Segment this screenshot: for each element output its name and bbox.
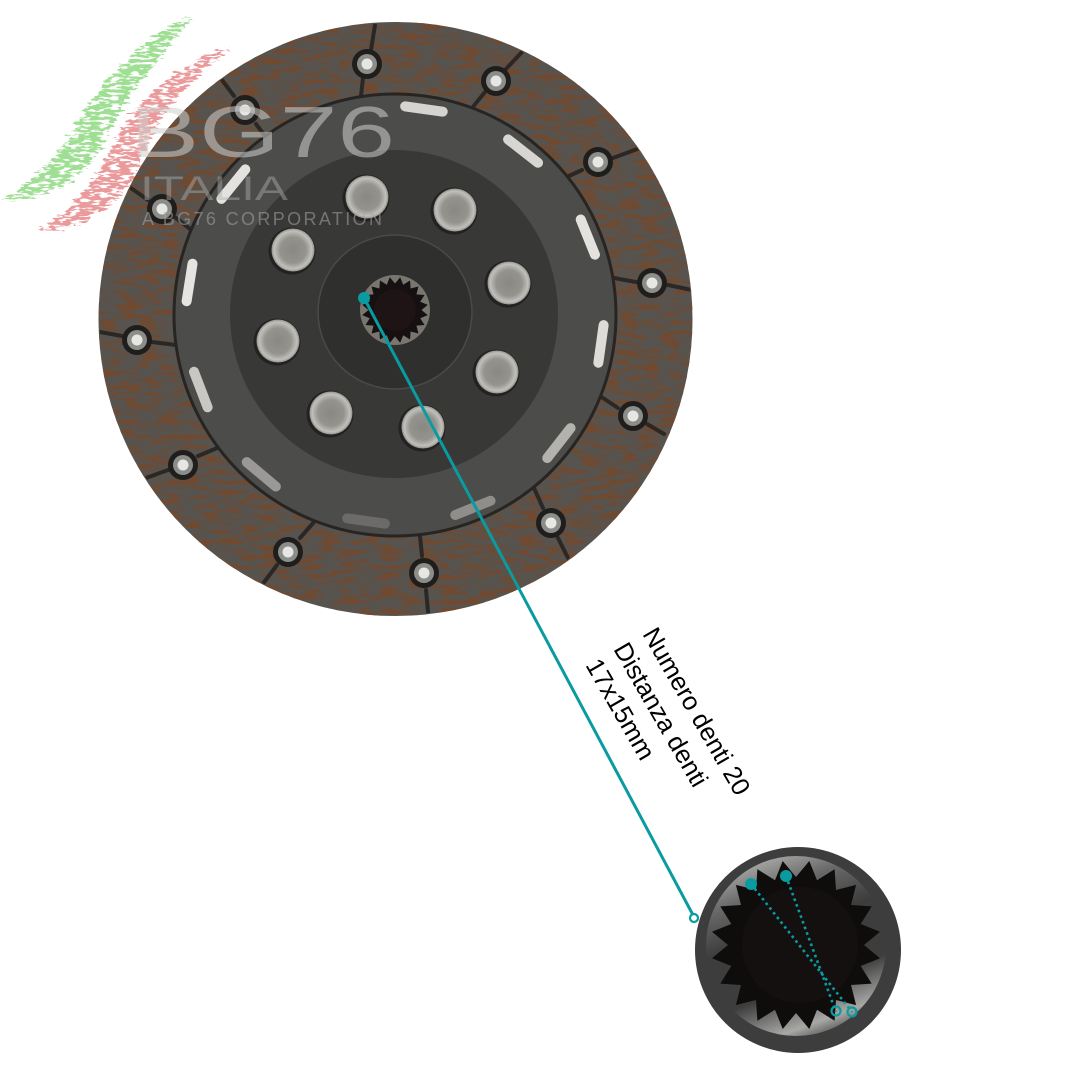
logo swoosh: red bbox=[38, 48, 230, 230]
logo wordmark bbox=[130, 93, 395, 229]
hub bbox=[318, 235, 472, 389]
splined hole bbox=[360, 275, 430, 345]
detail outer rim bbox=[695, 847, 901, 1053]
measurement line: hole to detail bbox=[358, 292, 698, 922]
logo: ITALIA: ITALIA bbox=[140, 170, 288, 208]
detail dark centre glow bbox=[742, 887, 858, 1003]
central plate bbox=[230, 150, 558, 478]
logo swoosh: green bbox=[2, 17, 192, 199]
clutch disc bbox=[98, 22, 692, 616]
detail worn inner ring bbox=[706, 856, 886, 1036]
label line 3: 17x15mm bbox=[580, 654, 660, 765]
ring slots bbox=[181, 101, 609, 529]
lining radial grooves bbox=[100, 25, 692, 612]
inner ring bbox=[174, 94, 616, 536]
dotted line B bbox=[786, 876, 836, 1012]
dotted line A bbox=[751, 884, 852, 1012]
label line 2: Distanza denti bbox=[608, 638, 713, 792]
infographic canvas bbox=[1, 16, 901, 1053]
end ring bbox=[690, 914, 698, 922]
start dot bbox=[358, 292, 370, 304]
label line 1: Numero denti 20 bbox=[637, 623, 755, 800]
inner rivets bbox=[254, 174, 532, 452]
spline detail circle bbox=[695, 847, 901, 1053]
outer rivets bbox=[122, 49, 667, 588]
logo: BG76: BG76 bbox=[130, 93, 395, 173]
marker dots bbox=[745, 870, 792, 890]
detail spline teeth bbox=[712, 861, 880, 1029]
tooth measurement markers bbox=[745, 870, 856, 1016]
friction lining bbox=[98, 22, 692, 616]
marker rings bbox=[832, 1006, 856, 1016]
rotated label: number of teeth and distance bbox=[580, 623, 755, 800]
logo: corporation tagline: A BG76 CORPORATION bbox=[142, 209, 382, 229]
